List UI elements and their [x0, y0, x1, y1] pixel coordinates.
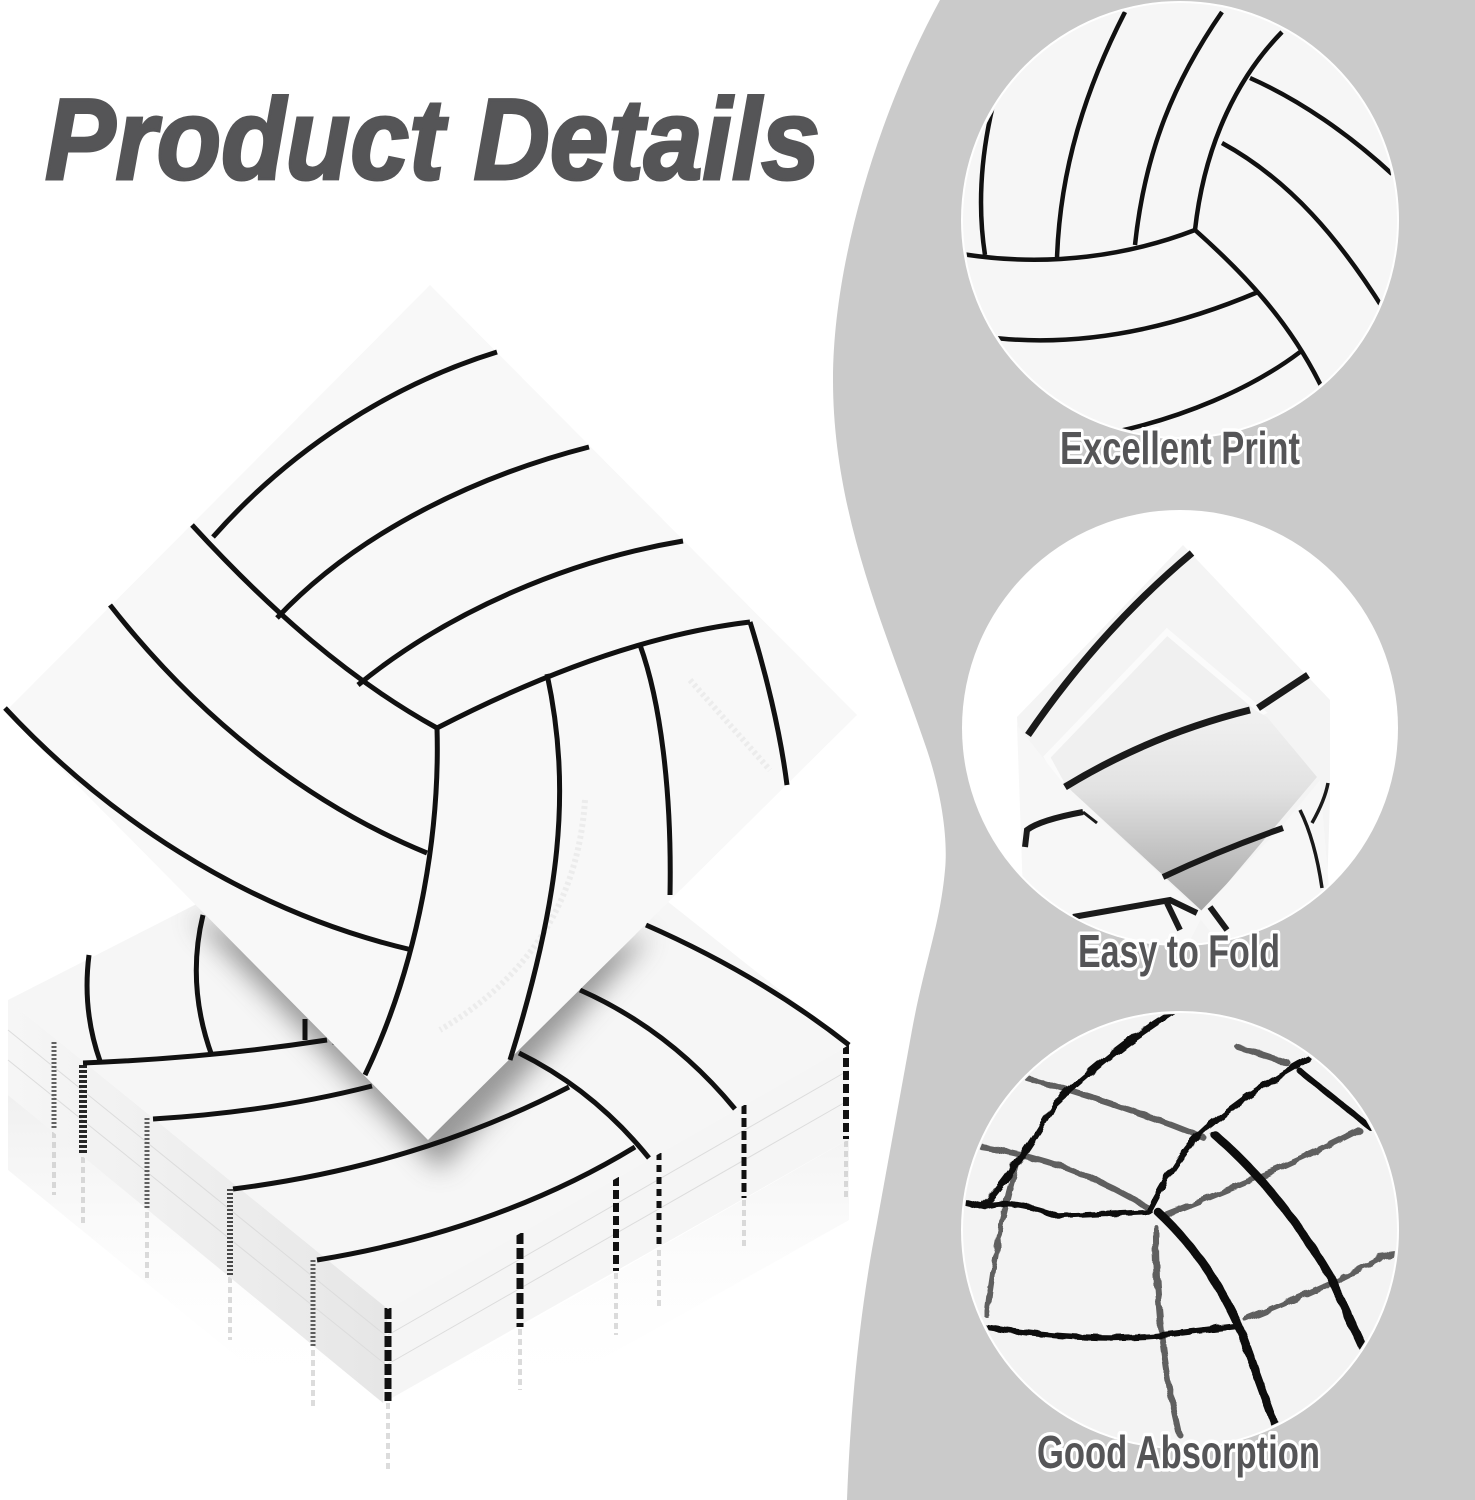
ink lines [964, 1013, 1394, 1434]
stack reflection [8, 1095, 849, 1480]
stack side layers [8, 1030, 849, 1364]
stack top face [8, 757, 849, 1309]
print lines [962, 12, 1392, 432]
label: easy to fold: Easy to Fold [1078, 925, 1280, 977]
fold lines [1025, 553, 1328, 930]
volleyball lines [5, 352, 787, 1075]
napkin stack [8, 902, 850, 1469]
label: good absorption: Good Absorption [1037, 1426, 1320, 1478]
detail circle: excellent print [962, 2, 1398, 438]
detail circle: easy to fold [962, 510, 1398, 950]
stack left side [8, 1000, 388, 1403]
stack side stripes [54, 1042, 846, 1401]
pocket shaded interior [1063, 707, 1317, 912]
folded napkin [1017, 545, 1330, 950]
grey curved background panel [833, 0, 1475, 1500]
detail circle: good absorption [962, 1012, 1398, 1448]
standing napkin [5, 285, 857, 1140]
pocket upper [1047, 632, 1262, 790]
circle background [962, 2, 1398, 438]
circle background [962, 510, 1398, 946]
napkin diamond [5, 285, 857, 1140]
circle background [962, 1012, 1398, 1448]
front fold flaps [1017, 725, 1203, 950]
shadow from standing napkin [190, 915, 650, 1170]
embossed texture [440, 680, 770, 1030]
label: excellent print: Excellent Print [1060, 422, 1300, 474]
stack top volleyball lines [83, 915, 849, 1260]
title: Product Details [45, 76, 820, 204]
stack right side [383, 1045, 849, 1403]
